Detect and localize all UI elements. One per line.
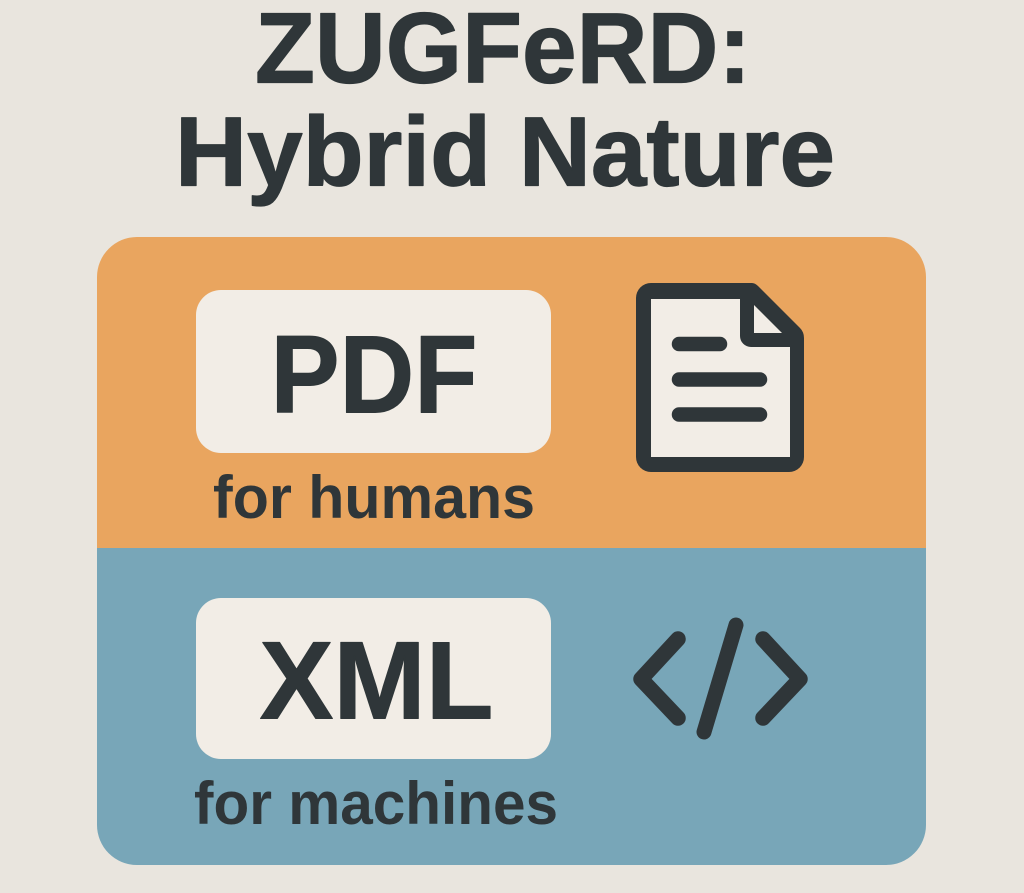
icon: code brackets [641, 625, 800, 732]
icon: document [636, 283, 804, 472]
XML label box: XML [260, 620, 494, 742]
panel: XML for machines [97, 548, 926, 865]
panel: PDF for humans [97, 237, 926, 548]
caption: for humans: for humans [213, 464, 535, 531]
PDF label box: PDF [270, 314, 478, 436]
caption: for machines: for machines [194, 770, 558, 837]
title [175, 0, 835, 206]
title: Hybrid Nature [175, 96, 835, 206]
PDF label box [196, 290, 551, 453]
XML label box [196, 598, 551, 759]
